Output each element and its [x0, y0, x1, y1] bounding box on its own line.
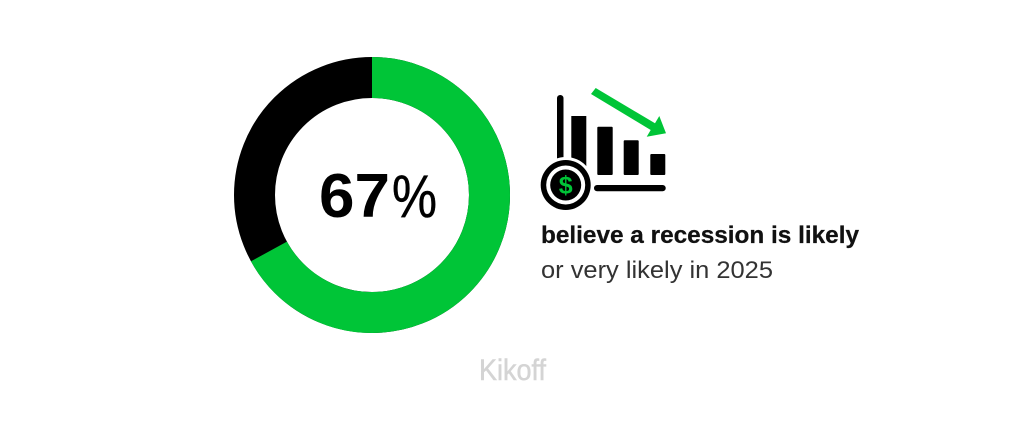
caption bold line: believe a recession is likely — [541, 222, 859, 249]
donut centre value: 67 — [319, 162, 390, 231]
vertical axis — [557, 95, 564, 161]
text block: caption — [541, 222, 859, 284]
donut centre value: % — [392, 163, 437, 230]
horizontal axis — [594, 185, 666, 191]
donut chart: 67 percent — [254, 78, 490, 312]
arrow trending down — [591, 88, 666, 137]
bars — [571, 116, 665, 175]
icon: falling bar chart with dollar coin — [538, 88, 666, 213]
donut segment: 67 percent (green) — [254, 78, 490, 312]
donut segment: remaining share (black) — [254, 78, 490, 312]
caption regular line: or very likely in 2025 — [541, 257, 773, 284]
logo: Kikoff: Kikoff — [479, 354, 547, 387]
donut centre value — [319, 162, 437, 231]
coin with dollar sign: $ — [559, 172, 573, 200]
